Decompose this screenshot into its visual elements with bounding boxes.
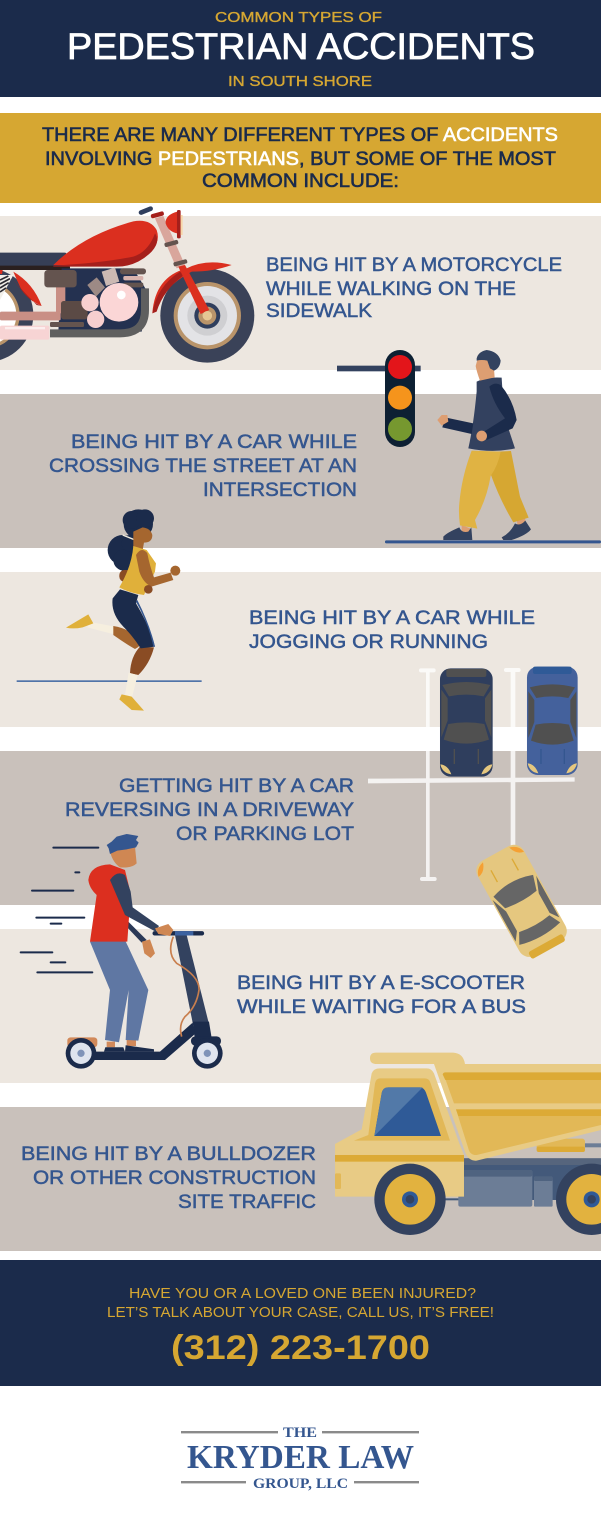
text: construction accident: OR OTHER CONSTRUCTION [33, 1167, 316, 1189]
text: intersection accident: CROSSING THE STREET AT AN [49, 455, 357, 477]
text: intersection accident: BEING HIT BY A CAR WHILE [71, 431, 357, 453]
text: e-scooter accident [237, 972, 526, 1018]
intro line 2: INVOLVING PEDESTRIANS, BUT SOME OF THE MOST [45, 148, 556, 170]
text: reversing accident: GETTING HIT BY A CAR [119, 775, 354, 797]
intro line 1: THERE ARE MANY DIFFERENT TYPES OF ACCIDENTS [42, 124, 558, 146]
text: motorcycle accident [266, 254, 562, 322]
icon: speed lines [21, 848, 98, 972]
text: reversing accident [65, 775, 354, 845]
text: motorcycle accident: SIDEWALK [266, 300, 372, 322]
text: reversing accident: OR PARKING LOT [176, 823, 354, 845]
text: motorcycle accident: BEING HIT BY A MOTORCYCLE [266, 254, 562, 276]
text: jogging accident [249, 607, 535, 653]
panel: intersection band [0, 394, 601, 548]
panel: construction band [0, 1107, 601, 1251]
header kicker: COMMON TYPES OF [215, 10, 382, 26]
call to action text: LET’S TALK ABOUT YOUR CASE, CALL US, IT’S FREE! [107, 1305, 494, 1321]
logo: The Kryder Law Group: THE [283, 1425, 317, 1441]
text: e-scooter accident: WHILE WAITING FOR A BUS [237, 996, 526, 1018]
intro line 3: COMMON INCLUDE: [202, 170, 399, 192]
text: jogging accident: JOGGING OR RUNNING [249, 631, 488, 653]
footer call to action [0, 1260, 601, 1386]
header banner [0, 0, 601, 97]
panel: jogging band [0, 572, 601, 727]
icon: motorcycle [0, 206, 254, 363]
text: construction accident: BEING HIT BY A BULLDOZER [21, 1143, 316, 1165]
icon: navy parked car [440, 668, 493, 777]
panel: e-scooter band [0, 929, 601, 1083]
logo: The Kryder Law Group [181, 1425, 419, 1492]
icon: parking lot lines [368, 668, 575, 881]
intro banner [0, 113, 601, 203]
icon: e-scooter rider [66, 834, 223, 1069]
call to action text: HAVE YOU OR A LOVED ONE BEEN INJURED? [129, 1286, 476, 1302]
panel: motorcycle band [0, 216, 601, 370]
text: construction accident [21, 1143, 316, 1213]
text: e-scooter accident: BEING HIT BY A E-SCOOTER [237, 972, 525, 994]
icon: dump truck [335, 1053, 601, 1235]
text: intersection accident [49, 431, 357, 501]
text: intersection accident: INTERSECTION [203, 479, 357, 501]
phone number: (312) 223-1700 [171, 1329, 430, 1367]
title: PEDESTRIAN ACCIDENTS [67, 26, 535, 67]
text: construction accident: SITE TRAFFIC [178, 1191, 316, 1213]
text: motorcycle accident: WHILE WALKING ON THE [266, 278, 516, 300]
icon: traffic light [337, 350, 421, 447]
text: reversing accident: REVERSING IN A DRIVEWAY [65, 799, 354, 821]
icon: jogging woman [17, 509, 202, 711]
icon: blue parked car [527, 667, 578, 775]
logo: The Kryder Law Group: GROUP, LLC [253, 1476, 348, 1492]
text: jogging accident: BEING HIT BY A CAR WHILE [249, 607, 535, 629]
panel: reversing band [0, 751, 601, 905]
call to action text [107, 1286, 494, 1321]
header location: IN SOUTH SHORE [228, 74, 372, 90]
icon: walking man [385, 350, 601, 543]
icon: yellow reversing car [472, 841, 572, 963]
logo: The Kryder Law Group: KRYDER LAW [187, 1439, 414, 1476]
